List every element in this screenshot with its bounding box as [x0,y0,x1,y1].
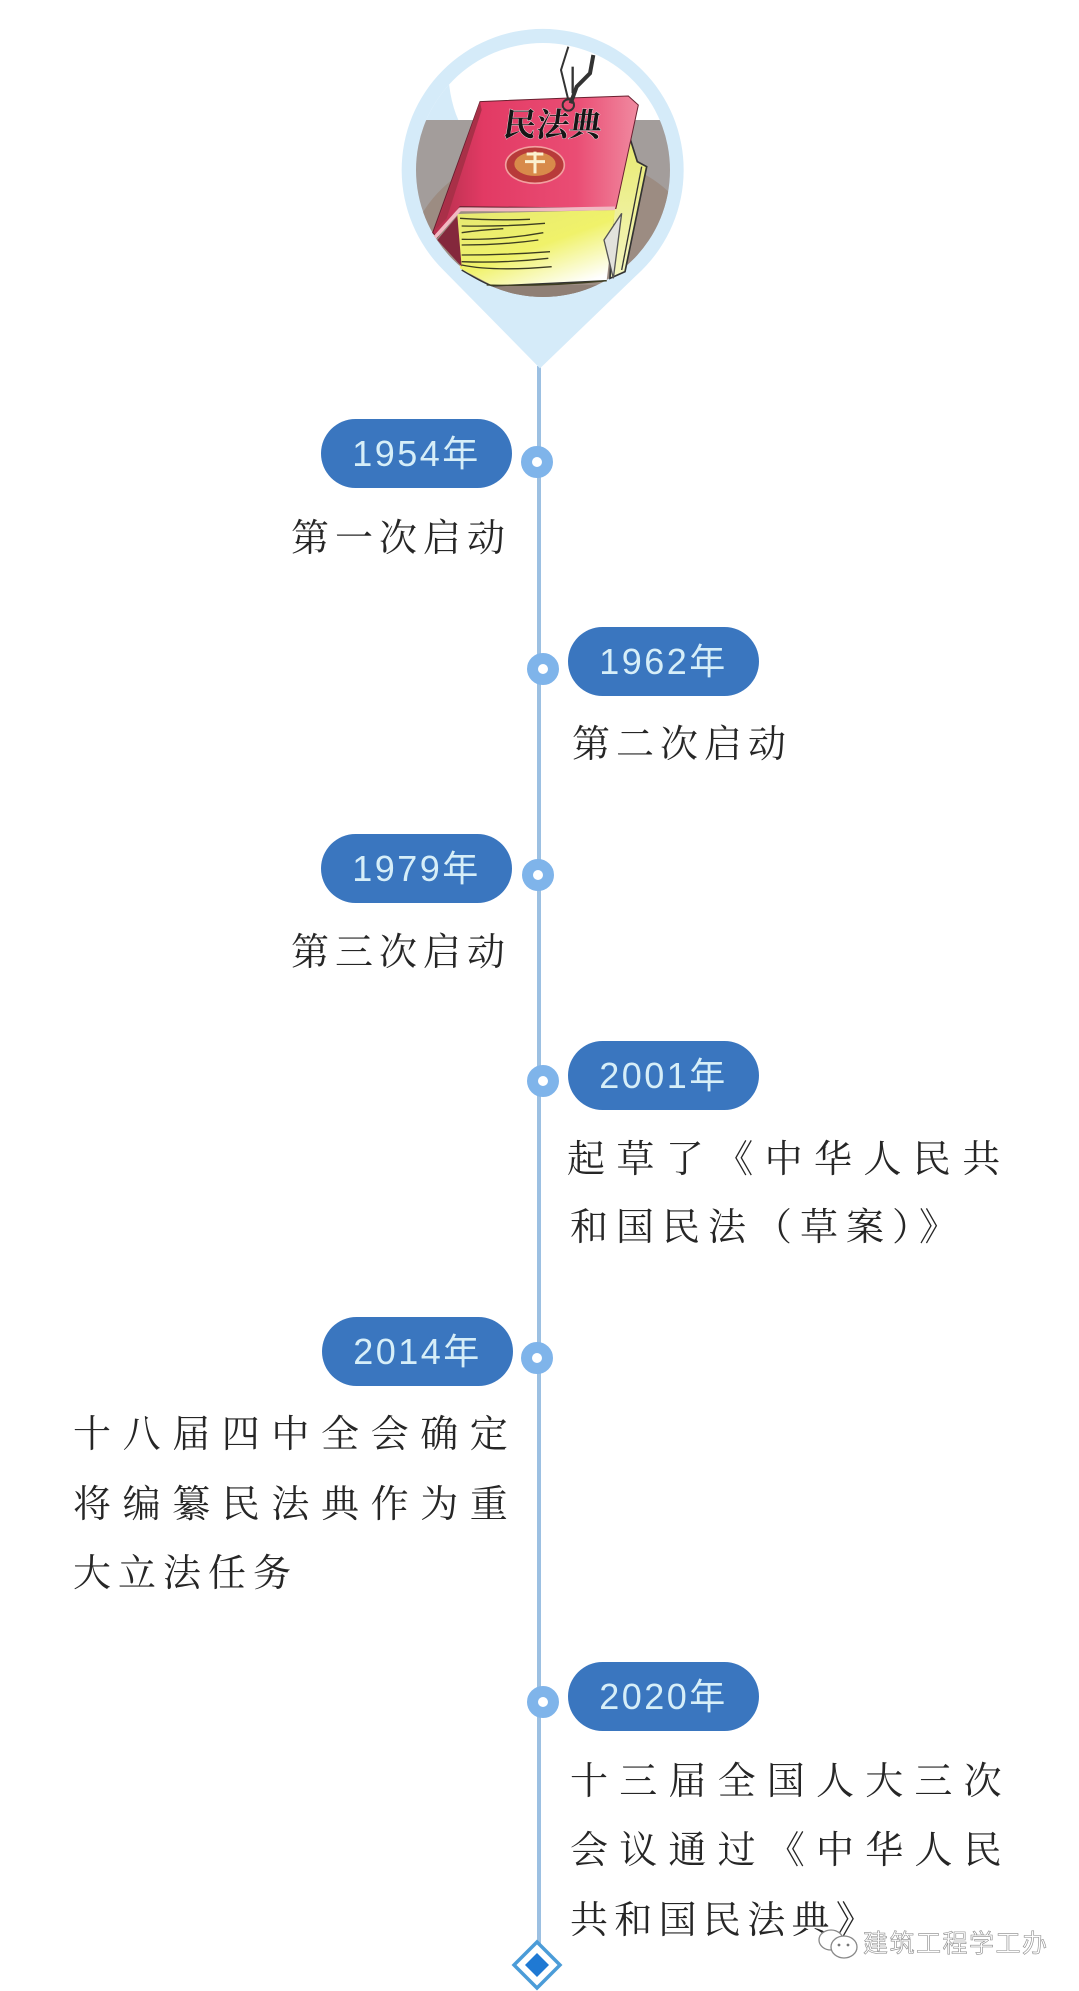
year pill: 2001 [568,1041,759,1110]
icon: chat bubbles [818,1929,858,1959]
year pill: 1954: 1954年 [352,433,481,474]
timeline dot [521,446,553,478]
timeline item: 2001 [527,1041,1012,1249]
watermark [818,1929,1049,1959]
timeline item: 1962 [527,627,792,766]
year pill: 1962 [568,627,759,696]
description: 十三届全国人大三次 [570,1761,1013,1803]
year pill: 2014 [322,1317,513,1386]
timeline dot [522,859,554,891]
cover [433,96,638,237]
book [433,47,647,286]
year pill: 2020 [568,1662,759,1731]
timeline item: 1979 [291,834,554,974]
description: 将编纂民法典作为重 [73,1484,519,1526]
description: 起草了《中华人民共 [567,1139,1012,1181]
year pill: 2020: 2020年 [599,1676,728,1717]
timeline dot [527,1686,559,1718]
timeline item: 2014 [73,1317,553,1595]
timeline dot [527,653,559,685]
icon: end diamond [512,1940,562,1990]
description: 第一次启动 [291,518,511,560]
description: 十八届四中全会确定 [73,1414,519,1456]
emblem [506,147,564,183]
year pill: 2001: 2001年 [599,1055,728,1096]
description: 大立法任务 [73,1553,298,1595]
timeline item: 2020 [527,1662,1013,1942]
icon: map pin with civil code book [402,28,684,368]
description: 第三次启动 [291,932,511,974]
description [570,1761,1013,1942]
side pages [610,138,647,278]
pin body [402,29,684,368]
page block [457,210,615,286]
year pill: 1954 [321,419,512,488]
year pill: 1979: 1979年 [352,848,481,889]
watermark text: 建筑工程学工办 [863,1930,1049,1958]
timeline dot [521,1342,553,1374]
year pill: 2014: 2014年 [353,1331,482,1372]
description [567,1139,1012,1249]
page lines [460,218,607,285]
timeline axis line [537,366,541,1956]
cover edge [435,208,615,237]
year pill: 1979 [321,834,512,903]
timeline item: 1954 [291,419,553,560]
description: 和国民法（草案）》 [570,1207,965,1249]
description [73,1414,519,1595]
description: 共和国民法典》 [570,1900,880,1942]
year pill: 1962: 1962年 [599,641,728,682]
description: 会议通过《中华人民 [570,1830,1013,1872]
timeline dot [527,1065,559,1097]
description: 第二次启动 [572,724,792,766]
cover title: 民法典 [501,107,608,144]
page corner [604,213,622,278]
pen nib [561,47,593,111]
